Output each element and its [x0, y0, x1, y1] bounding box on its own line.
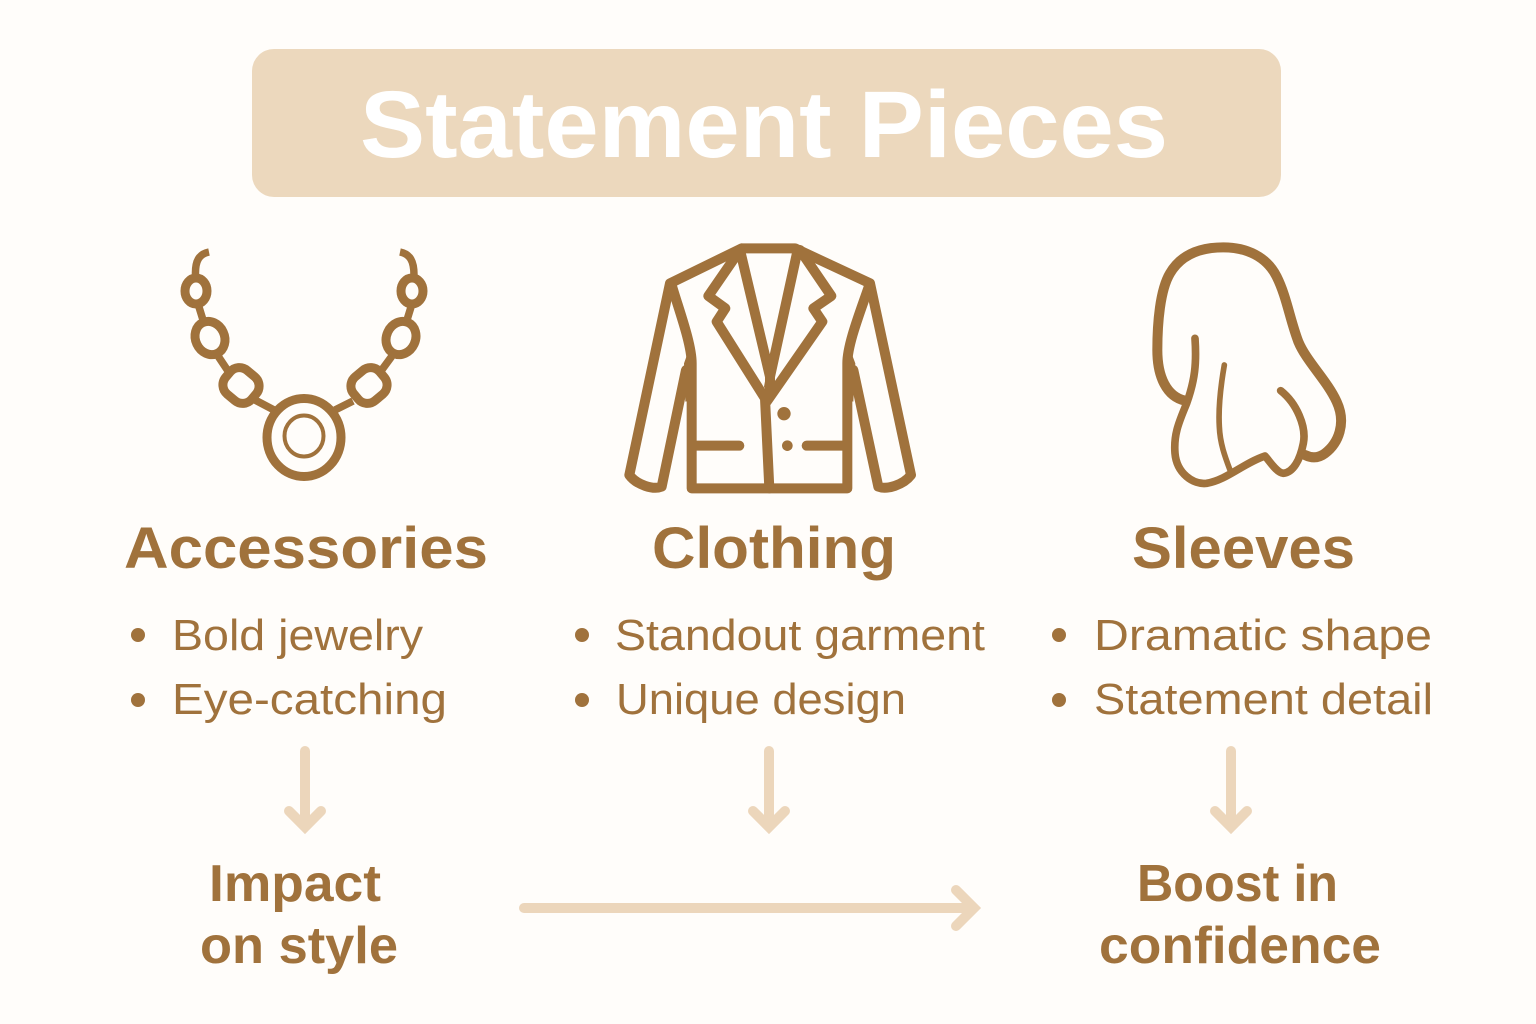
bullet list: clothing	[575, 611, 985, 724]
bullet list: sleeves	[1052, 611, 1433, 724]
column: clothing	[575, 516, 985, 724]
outcome: impact on style: on style	[200, 917, 398, 975]
icon: blazer jacket	[629, 248, 911, 488]
bullet list: accessories	[131, 611, 447, 724]
arrow: accessories down	[289, 751, 321, 827]
title: Statement Pieces	[360, 72, 1168, 178]
arrow: clothing down	[753, 751, 785, 827]
bullet list: accessories: Bold jewelry	[172, 611, 423, 660]
heading: clothing: Clothing	[652, 516, 896, 581]
icon: necklace	[185, 252, 423, 476]
outcome: boost in confidence	[1099, 855, 1381, 975]
outcome: boost in confidence: Boost in	[1137, 855, 1338, 913]
arrow: impact to confidence	[524, 890, 974, 926]
title banner	[252, 49, 1281, 197]
outcome: impact on style	[200, 855, 398, 975]
column: sleeves	[1052, 516, 1433, 724]
bullet list: sleeves: Dramatic shape	[1094, 611, 1432, 660]
bullet list: sleeves: Statement detail	[1094, 675, 1433, 724]
heading: sleeves: Sleeves	[1132, 516, 1355, 581]
bullet list: clothing: Unique design	[616, 675, 906, 724]
heading: accessories: Accessories	[124, 516, 488, 581]
icon: sleeve	[1157, 247, 1341, 483]
bullet list: clothing: Standout garment	[615, 611, 985, 660]
bullet list: accessories: Eye-catching	[172, 675, 447, 724]
outcome: boost in confidence: confidence	[1099, 917, 1381, 975]
arrow: sleeves down	[1215, 751, 1247, 827]
outcome: impact on style: Impact	[209, 855, 381, 913]
column: accessories	[124, 516, 488, 724]
